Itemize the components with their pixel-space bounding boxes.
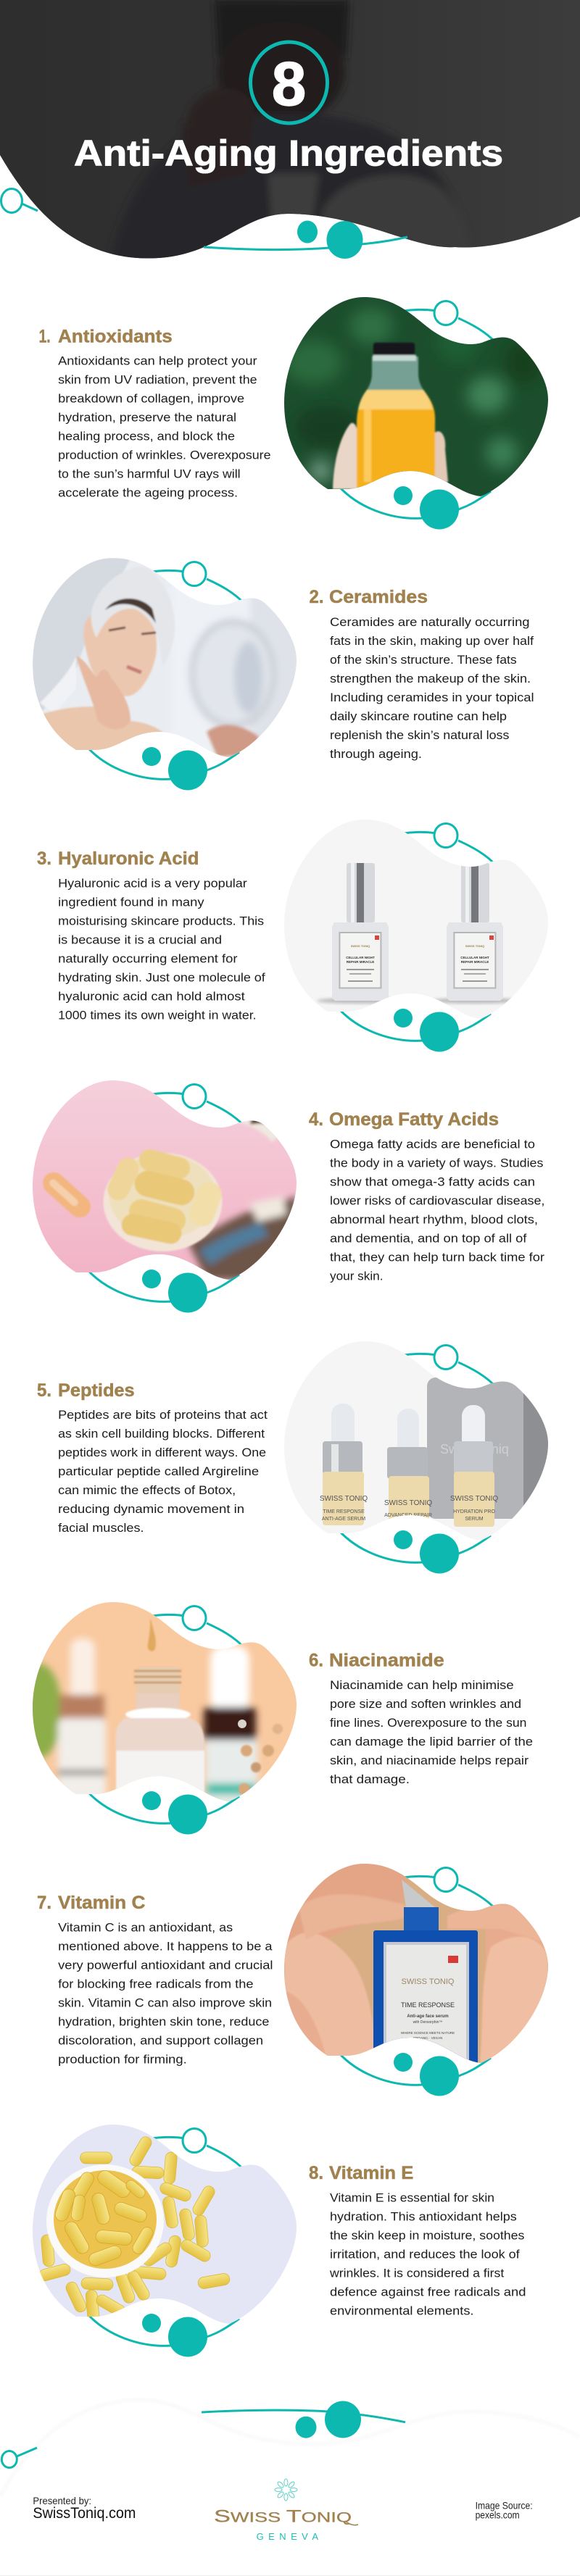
dropper middle: SWISS TONIQ [384,1499,432,1507]
body text 3: hydrating skin. Just one molecule of [58,971,265,984]
heading 8: 8. [309,2163,323,2183]
heading 1: Antioxidants [58,326,173,346]
ring and dots 3 [394,823,459,1052]
title: Anti-Aging Ingredients [74,133,503,174]
body text 5: facial muscles. [58,1522,144,1535]
body text 5: reducing dynamic movement in [58,1503,244,1516]
body text 8 [329,2192,526,2318]
body text 1: healing process, and block the [58,430,235,443]
header circle ring with number 8 [251,42,328,123]
image source [476,2500,533,2520]
body text 8: environmental elements. [330,2305,474,2318]
body text 6: that damage. [330,1773,410,1786]
image blob 7: hands holding blue bottle [281,1864,548,2096]
body text 5: Peptides are bits of proteins that act [58,1409,268,1422]
bottle left: CELLULAR NIGHT [346,956,375,959]
body text 7: hydration, brighten skin tone, reduce [58,2016,269,2029]
body text 4: your skin. [330,1270,383,1283]
body text 7 [58,1922,273,2067]
body text 2: replenish the skin’s natural loss [330,729,509,742]
bottle right: SWISS TONIQ [465,944,484,948]
image blob 8: vitamin e capsules in bowl [33,2125,297,2356]
section 4: omega fatty acids [33,1080,545,1313]
body text 3: hyaluronic acid can hold almost [58,990,245,1003]
heading 7: Vitamin C [58,1893,145,1913]
heading 6: 6. [309,1650,323,1670]
heading 4: 4. [309,1109,323,1130]
dropper left: SWISS TONIQ [320,1495,368,1503]
image blob 5: three dropper bottles and silver tin: Swiss Toniq [440,1442,509,1456]
heading 2: 2. [309,587,323,607]
dropper left [320,1404,368,1525]
bottle right: REPAIR MIRACLE [461,960,489,964]
section 3: hyaluronic acid [37,820,548,1052]
body text 6: fine lines. Overexposure to the sun [330,1717,526,1730]
body text 7: production for firming. [58,2054,187,2067]
image blob 7: hands holding blue bottle: WHERE SCIENCE MEETS NATURE [401,2031,455,2035]
section 5: peptides [37,1341,558,1574]
body text 4: and dementia, and on top of all of [330,1232,527,1245]
dropper middle [384,1409,432,1527]
body text 7: mentioned above. It happens to be a [58,1941,273,1954]
body text 6 [330,1679,533,1786]
body text 1 [58,355,270,500]
body text 6: can damage the lipid barrier of the [330,1735,533,1748]
body text 4: abnormal heart rhythm, blood clots, [330,1213,538,1226]
image blob 3: two serum bottles [284,820,548,1052]
dropper left: ANTI-AGE SERUM [322,1517,365,1522]
body text 8: hydration. This antioxidant helps [330,2211,517,2224]
body text 8: the skin keep in moisture, soothes [330,2230,524,2243]
body text 2 [330,616,534,761]
heading 4: Omega Fatty Acids [329,1109,499,1130]
dropper right: SWISS TONIQ [450,1495,498,1503]
footer faint wave [0,2400,580,2496]
logo: swiss toniq geneva [214,2479,358,2542]
heading 7: 7. [37,1893,51,1913]
ring and dots 1 [394,301,459,529]
body text 1: to the sun’s harmful UV rays will [58,468,241,481]
bottle left: SWISS TONIQ [351,944,370,948]
image source: Image Source: [476,2500,533,2512]
heading 6: Niacinamide [329,1650,444,1670]
body text 7: Vitamin C is an antioxidant, as [58,1922,233,1935]
ring and dots 8 [142,2129,207,2356]
body text 5: peptides work in different ways. One [58,1446,266,1459]
body text 1: hydration, preserve the natural [58,412,236,425]
body text 8: wrinkles. It is considered a first [329,2267,505,2280]
body text 7: discoloration, and support collagen [58,2035,263,2048]
body text 2: Ceramides are naturally occurring [330,616,529,629]
body text 1: breakdown of collagen, improve [58,393,244,406]
header circle ring with number 8: 8 [272,50,306,119]
body text 1: production of wrinkles. Overexposure [58,449,270,462]
presented by: SwissToniq.com [33,2505,136,2522]
body text 3 [58,877,265,1022]
body text 4 [330,1138,545,1283]
bottle right [447,863,503,1001]
body text 3: Hyaluronic acid is a very popular [58,877,247,890]
image blob 6: serum bottles on peach [18,1602,297,1835]
icon: logo star [275,2479,297,2501]
dropper middle: ADVANCED REPAIR [384,1513,432,1518]
heading 3: 3. [37,849,51,869]
section 8: vitamin e [33,2125,526,2356]
bottle left [332,863,389,1001]
body text 6: pore size and soften wrinkles and [330,1698,521,1711]
image blob 1: juice bottle [284,297,548,529]
heading 1: 1. [39,326,51,346]
body text 2: Including ceramides in your topical [330,691,534,704]
body text 2: strengthen the makeup of the skin. [330,672,531,685]
heading 5: 5. [37,1380,51,1401]
body text 5: as skin cell building blocks. Different [58,1427,265,1441]
bottle right: CELLULAR NIGHT [460,956,489,959]
body text 5 [58,1409,268,1535]
image blob 7: hands holding blue bottle: ORGANIC · VEGAN [413,2036,442,2040]
presented by: Presented by: [33,2495,91,2506]
body text 3: naturally occurring element for [58,952,238,965]
body text 3: is because it is a crucial and [58,933,222,946]
header: dark photo banner [0,0,580,268]
body text 8: irritation, and reduces the look of [330,2248,520,2262]
body text 5: can mimic the effects of Botox, [58,1484,236,1497]
body text 8: defence against free radicals and [330,2286,526,2299]
image source: pexels.com [476,2509,520,2520]
dropper right: SERUM [465,1517,484,1522]
ring and dots 5 [394,1345,459,1574]
presented by [33,2495,136,2522]
body text 7: very powerful antioxidant and crucial [58,1959,273,1972]
body text 1: accelerate the ageing process. [58,487,238,500]
section 1: antioxidants [39,297,548,529]
body text 4: Omega fatty acids are beneficial to [330,1138,535,1151]
dropper left: TIME RESPONSE [323,1509,365,1514]
body text 1: Antioxidants can help protect your [58,355,257,368]
body text 4: that, they can help turn back time for [330,1251,545,1264]
body text 6: skin, and niacinamide helps repair [330,1754,529,1767]
body text 3: 1000 times its own weight in water. [58,1009,257,1022]
footer decorative teal connector [1,2401,405,2468]
heading 2: Ceramides [329,587,428,607]
body text 7: skin. Vitamin C can also improve skin [58,1997,272,2010]
body text 2: fats in the skin, making up over half [330,635,534,648]
body text 4: show that omega-3 fatty acids can [330,1175,535,1188]
body text 3: moisturising skincare products. This [58,914,264,928]
ring and dots 4 [142,1084,207,1313]
section 7: vitamin c [37,1864,548,2096]
ring and dots 7 [394,1868,459,2096]
image blob 5: three dropper bottles and silver tin [284,1341,558,1574]
image blob 7: hands holding blue bottle: with Densorphin™ [413,2020,442,2025]
image blob 7: hands holding blue bottle: SWISS TONIQ [402,1977,455,1986]
body text 4: the body in a variety of ways. Studies [330,1156,543,1170]
dropper right: HYDRATION PRO [453,1509,495,1514]
body text 3: ingredient found in many [58,896,204,909]
body text 2: of the skin’s structure. These fats [330,654,517,667]
image blob 2: woman with towel and mirror [33,558,301,790]
section 6: niacinamide [18,1602,533,1835]
ring and dots 2 [142,562,207,790]
body text 6: Niacinamide can help minimise [330,1679,514,1692]
body text 7: for blocking free radicals from the [58,1978,253,1991]
heading 3: Hyaluronic Acid [58,849,199,869]
section 2: ceramides [33,558,534,790]
image blob 7: hands holding blue bottle: Anti-age face serum [407,2014,449,2019]
image blob 7: hands holding blue bottle: TIME RESPONSE [401,2001,455,2009]
bottle left: REPAIR MIRACLE [347,960,374,964]
body text 2: daily skincare routine can help [330,710,507,723]
dropper right [450,1405,498,1527]
logo: swiss toniq geneva: GENEVA [257,2531,318,2542]
image blob 4: omega capsules on pink [33,1080,297,1313]
header decorative teal connector [1,188,407,259]
heading 5: Peptides [58,1380,135,1401]
ring and dots 6 [142,1606,207,1835]
body text 8: Vitamin E is essential for skin [330,2192,494,2205]
body text 5: particular peptide called Argireline [58,1465,259,1478]
logo: swiss toniq geneva: S WISS T ONIQ [214,2507,352,2527]
body text 1: skin from UV radiation, prevent the [58,374,257,387]
body text 2: through ageing. [330,748,422,761]
body text 4: lower risks of cardiovascular disease, [330,1194,544,1207]
heading 8: Vitamin E [329,2163,413,2183]
